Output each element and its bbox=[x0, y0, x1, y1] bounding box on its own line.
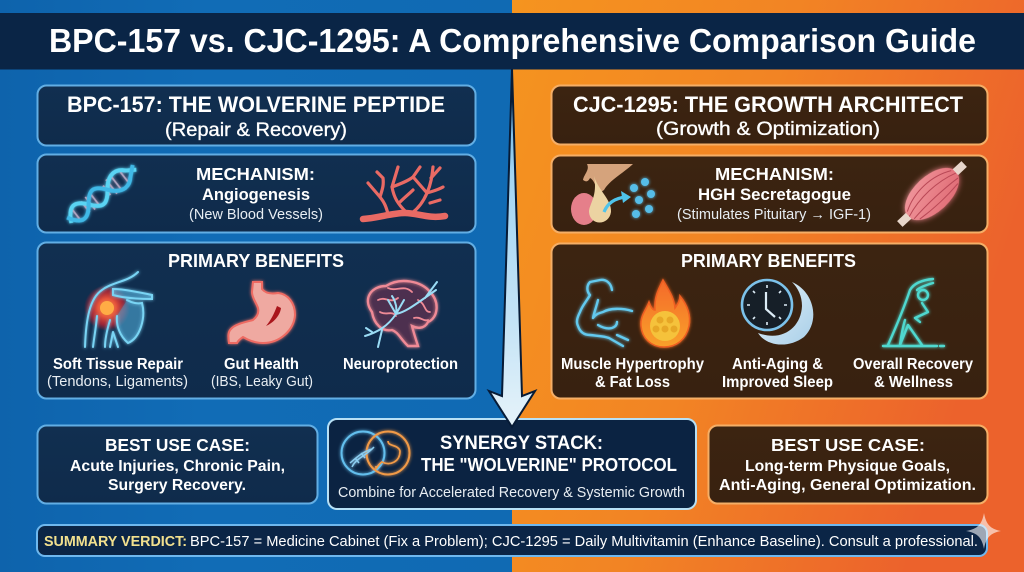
verdict label: SUMMARY VERDICT: bbox=[44, 534, 187, 550]
benefit label: muscle hypertrophy and fat loss: & Fat Loss bbox=[595, 374, 670, 391]
best use heading: BEST USE CASE: bbox=[105, 435, 250, 455]
best use text: Anti-Aging, General Optimization. bbox=[719, 477, 976, 494]
icon: brain with nerves bbox=[365, 281, 437, 347]
icon: corner sparkle bbox=[966, 513, 1001, 549]
icon: muscle bbox=[888, 151, 976, 237]
benefit label: overall recovery and wellness bbox=[853, 356, 973, 391]
panel: BPC-157 header bbox=[38, 86, 476, 146]
icon: DNA helix bbox=[63, 161, 141, 227]
heading: primary benefits: PRIMARY BENEFITS bbox=[168, 251, 344, 271]
panel: BPC-157 mechanism bbox=[38, 154, 476, 232]
synergy description: Combine for Accelerated Recovery & Systemic Growth bbox=[338, 485, 685, 501]
heading: BPC-157: BPC-157: THE WOLVERINE PEPTIDE bbox=[67, 92, 445, 117]
benefit label: gut health: Gut Health bbox=[224, 356, 299, 373]
benefit label: overall recovery and wellness: & Wellness bbox=[874, 374, 953, 391]
benefit label: overall recovery and wellness: Overall Recovery bbox=[853, 356, 973, 373]
mechanism note: (New Blood Vessels) bbox=[189, 207, 323, 223]
synergy heading line 1: SYNERGY STACK: bbox=[440, 433, 603, 454]
icon: pituitary gland releasing hormone bbox=[571, 164, 655, 225]
panel: CJC-1295 primary benefits bbox=[552, 244, 988, 398]
panel: BPC-157 primary benefits bbox=[38, 242, 476, 398]
panel: CJC-1295 header bbox=[552, 86, 988, 144]
heading: primary benefits: PRIMARY BENEFITS bbox=[681, 251, 856, 271]
icon: stomach bbox=[228, 282, 295, 343]
mechanism heading: MECHANISM: bbox=[715, 164, 834, 184]
icon: blood vessels bbox=[363, 167, 445, 219]
synergy heading line 2: THE "WOLVERINE" PROTOCOL bbox=[421, 455, 677, 475]
benefit note: tendons and ligaments: (Tendons, Ligaments) bbox=[47, 374, 188, 390]
benefit label: neuroprotection: Neuroprotection bbox=[343, 356, 458, 373]
benefit label: muscle hypertrophy and fat loss bbox=[561, 356, 704, 391]
best use text: Acute Injuries, Chronic Pain, bbox=[70, 458, 285, 475]
mechanism heading: MECHANISM: bbox=[196, 164, 315, 184]
heading: CJC-1295: CJC-1295: THE GROWTH ARCHITECT bbox=[573, 92, 964, 117]
benefit label: anti-aging and improved sleep bbox=[722, 356, 833, 391]
icon: overlapping DNA and stomach circles bbox=[342, 432, 410, 474]
icon: shoulder joint bbox=[84, 272, 152, 347]
benefit label: soft tissue repair: Soft Tissue Repair bbox=[53, 356, 183, 373]
arrow: central downward arrow bbox=[489, 69, 535, 427]
benefit label: anti-aging and improved sleep: Anti-Aging & bbox=[732, 356, 823, 373]
icon: person stretching bbox=[883, 279, 944, 346]
icon: clock and crescent moon bbox=[742, 280, 813, 345]
verdict text: BPC-157 = Medicine Cabinet (Fix a Problem); CJC-1295 = Daily Multivitamin (Enhance Baseline). Consult a professional. bbox=[190, 534, 978, 550]
best use text: Long-term Physique Goals, bbox=[745, 458, 950, 475]
icon: flexed arm bbox=[577, 280, 632, 346]
best use text: Surgery Recovery. bbox=[108, 477, 246, 494]
mechanism note: (Stimulates Pituitary → IGF-1) bbox=[677, 207, 871, 223]
panel: CJC-1295 best use case bbox=[708, 426, 988, 504]
panel: CJC-1295 mechanism bbox=[552, 151, 988, 237]
mechanism name: HGH Secretagogue bbox=[698, 186, 851, 204]
title banner bbox=[0, 13, 1024, 70]
subheading: repair and recovery: (Repair & Recovery) bbox=[165, 119, 347, 141]
panel: synergy stack bbox=[328, 419, 696, 509]
background: blue half bbox=[0, 0, 512, 572]
best use text bbox=[719, 458, 976, 494]
benefit label: anti-aging and improved sleep: Improved Sleep bbox=[722, 374, 833, 391]
benefit label: muscle hypertrophy and fat loss: Muscle Hypertrophy bbox=[561, 356, 704, 373]
title: BPC-157 vs. CJC-1295: A Comprehensive Comparison Guide bbox=[49, 23, 976, 60]
mechanism name: Angiogenesis bbox=[202, 186, 310, 204]
best use text bbox=[70, 458, 285, 494]
panel: BPC-157 best use case bbox=[38, 426, 318, 504]
best use heading: BEST USE CASE: bbox=[771, 435, 925, 455]
benefit note: IBS and leaky gut: (IBS, Leaky Gut) bbox=[211, 374, 313, 390]
panel: summary verdict bbox=[37, 525, 987, 556]
icon: fat-burning flame bbox=[641, 280, 690, 347]
background: orange half bbox=[512, 0, 1024, 572]
subheading: growth and optimization: (Growth & Optimization) bbox=[656, 118, 880, 140]
